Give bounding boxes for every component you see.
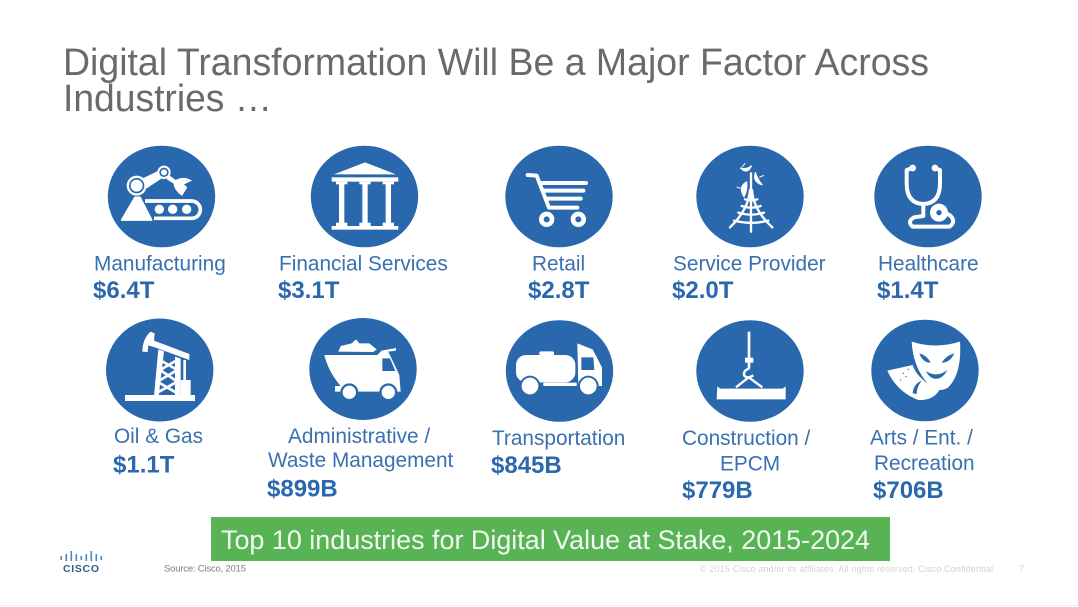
title: Digital Transformation Will Be a Major Factor Across xyxy=(63,42,929,84)
panel: transportation xyxy=(491,320,625,479)
value: retail: $2.8T xyxy=(528,277,590,304)
label: construction and epcm: EPCM xyxy=(720,452,780,476)
panel: service provider xyxy=(672,146,826,304)
panel: manufacturing xyxy=(93,146,226,304)
logo: cisco xyxy=(60,551,102,575)
icon: shopping cart xyxy=(505,146,613,247)
label: administrative and waste management: Waste Management xyxy=(268,449,454,472)
icon: bank building xyxy=(311,146,418,247)
label: administrative and waste management xyxy=(268,425,454,472)
label: administrative and waste management: Administrative / xyxy=(288,425,430,448)
value: healthcare: $1.4T xyxy=(877,277,939,304)
panel: retail xyxy=(505,146,613,304)
value: transportation: $845B xyxy=(491,452,562,479)
label: service provider: Service Provider xyxy=(673,252,826,276)
source note: Source: Cisco, 2015 xyxy=(164,564,246,574)
value: manufacturing: $6.4T xyxy=(93,277,155,304)
icon: crane hook and beam xyxy=(696,320,804,422)
label: healthcare: Healthcare xyxy=(878,252,979,276)
panel: arts, entertainment and recreation xyxy=(870,320,979,504)
icon: manufacturing robot arm xyxy=(108,146,215,247)
value: administrative and waste management: $899B xyxy=(267,476,338,502)
icon: theatre masks xyxy=(871,320,979,421)
label: arts, entertainment and recreation xyxy=(870,426,975,475)
banner: top 10 industries xyxy=(211,517,890,561)
copyright footer: © 2015 Cisco and/or its affiliates. All rights reserved. Cisco Confidential xyxy=(700,564,993,574)
value: arts, entertainment and recreation: $706B xyxy=(873,477,944,504)
label: arts, entertainment and recreation: Arts / Ent. / xyxy=(870,426,973,450)
value: construction and epcm: $779B xyxy=(682,477,753,504)
value: oil and gas: $1.1T xyxy=(113,452,175,478)
icon: antenna tower xyxy=(696,146,804,247)
icon: tanker truck xyxy=(506,320,613,422)
label: construction and epcm xyxy=(682,427,811,476)
icon: dump truck xyxy=(309,318,417,420)
title: Industries … xyxy=(63,78,272,120)
logo: cisco: CISCO xyxy=(63,563,99,575)
value: financial services: $3.1T xyxy=(278,277,340,304)
page number: 7 xyxy=(1019,564,1024,574)
title xyxy=(63,42,929,120)
label: retail: Retail xyxy=(532,252,585,276)
banner: top 10 industries: Top 10 industries for Digital Value at Stake, 2015-2024 xyxy=(221,525,870,555)
label: manufacturing: Manufacturing xyxy=(94,252,226,276)
icon: stethoscope xyxy=(874,146,982,247)
label: construction and epcm: Construction / xyxy=(682,427,811,450)
panel: oil and gas xyxy=(106,318,213,478)
label: transportation: Transportation xyxy=(492,427,625,450)
panel: administrative and waste management xyxy=(267,318,454,502)
icon: oil pump xyxy=(106,318,213,422)
label: arts, entertainment and recreation: Recreation xyxy=(874,452,975,475)
label: oil and gas: Oil & Gas xyxy=(114,425,203,448)
value: service provider: $2.0T xyxy=(672,277,734,304)
panel: healthcare xyxy=(874,146,982,304)
panel: construction and epcm xyxy=(682,320,811,504)
panel: financial services xyxy=(278,146,448,304)
label: financial services: Financial Services xyxy=(279,252,448,276)
